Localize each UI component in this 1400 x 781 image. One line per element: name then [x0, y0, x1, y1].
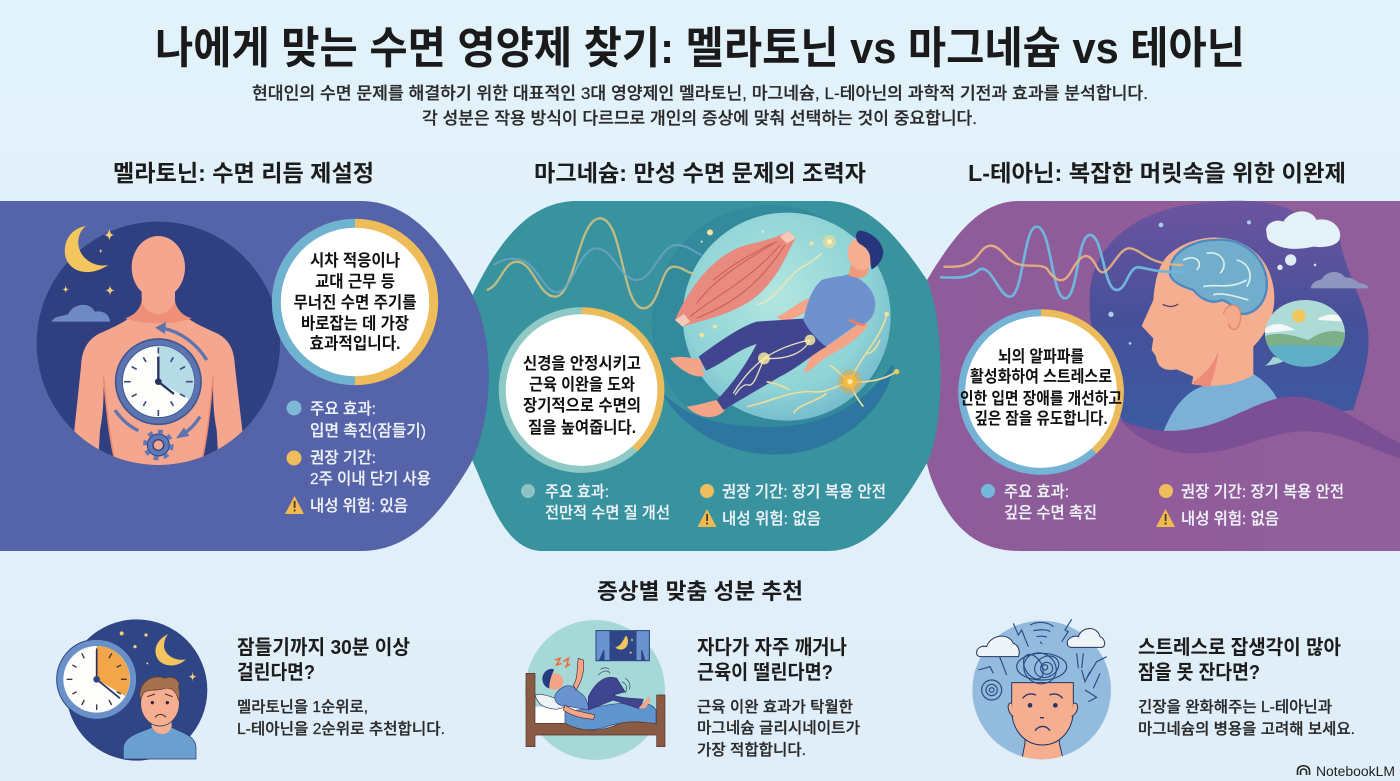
heading: recommendations: 증상별 맞춤 성분 추천 — [597, 579, 803, 604]
callout: melatonin: 바로잡는 데 가장 — [301, 314, 409, 333]
question text — [1138, 636, 1341, 684]
panel: magnesium — [460, 201, 940, 551]
callout: L-theanine: 인한 입면 장애를 개선하고 — [960, 389, 1122, 408]
callout: L-theanine: 뇌의 알파파를 — [998, 346, 1084, 366]
answer text — [237, 698, 445, 738]
legend: L-theanine: 권장 기간: 장기 복용 안전 — [1181, 483, 1344, 501]
icon: stressed head with tangled thoughts — [972, 619, 1111, 760]
question text: 걸린다면? — [237, 661, 315, 684]
callout: melatonin: 효과적입니다. — [310, 334, 400, 353]
callout: L-theanine: 깊은 잠을 유도합니다. — [974, 409, 1108, 428]
heading: magnesium: 마그네슘: 만성 수면 문제의 조력자 — [534, 160, 866, 186]
question text: 스트레스로 잡생각이 많아 — [1138, 636, 1341, 659]
answer text: 마그네슘 글리시네이트가 — [697, 719, 860, 737]
recommendation 2 — [525, 620, 860, 760]
legend: magnesium: 권장 기간: 장기 복용 안전 — [722, 483, 886, 501]
callout: L-theanine: 활성화하여 스트레스로 — [970, 367, 1112, 386]
panel: melatonin — [0, 201, 489, 551]
illustration: relaxed body with muscle and nerves — [487, 205, 899, 454]
legend: melatonin — [285, 400, 431, 515]
question text: 잠들기까지 30분 이상 — [237, 636, 410, 659]
title: 나에게 맞는 수면 영양제 찾기: 멜라토닌 vs 마그네슘 vs 테아닌 — [155, 24, 1245, 73]
callout: L-theanine — [960, 312, 1122, 472]
answer text: 마그네슘의 병용을 고려해 보세요. — [1138, 720, 1355, 738]
heading: L-theanine: L-테아닌: 복잡한 머릿속을 위한 이완제 — [968, 160, 1346, 186]
question text: 근육이 떨린다면? — [697, 661, 833, 684]
callout: melatonin: 무너진 수면 주기를 — [294, 293, 416, 312]
legend: magnesium: 주요 효과: — [545, 483, 609, 501]
logo: NotebookLM: NotebookLM — [1316, 764, 1395, 779]
legend: melatonin: 내성 위험: 있음 — [310, 497, 408, 515]
answer text: 근육 이완 효과가 탁월한 — [697, 698, 853, 716]
icon: clock and worried person — [57, 619, 207, 761]
legend: melatonin: 주요 효과: — [310, 400, 376, 418]
icon: waking in bed — [525, 620, 665, 760]
legend: magnesium — [521, 483, 886, 528]
legend: melatonin: 권장 기간: — [310, 449, 376, 467]
callout: melatonin — [275, 222, 435, 382]
answer text — [697, 698, 860, 759]
legend: magnesium: 전만적 수면 질 개선 — [545, 504, 670, 522]
legend: magnesium: 내성 위험: 없음 — [722, 510, 821, 528]
answer text — [1138, 698, 1355, 738]
legend: L-theanine — [981, 483, 1344, 528]
answer text: L-테아닌을 2순위로 추천합니다. — [237, 720, 445, 738]
illustration: head with brain and waves — [940, 201, 1400, 458]
answer text: 가장 적합합니다. — [697, 741, 806, 759]
panel: L-theanine — [917, 201, 1400, 551]
legend: L-theanine: 주요 효과: — [1004, 483, 1069, 501]
callout: magnesium: 질을 높여줍니다. — [528, 418, 636, 437]
callout: magnesium — [502, 310, 662, 470]
recommendation 1 — [57, 619, 445, 761]
callout: magnesium: 근육 이완을 도와 — [529, 375, 635, 394]
answer text: 멜라토닌을 1순위로, — [237, 698, 368, 716]
legend: L-theanine: 내성 위험: 없음 — [1181, 510, 1279, 528]
answer text: 긴장을 완화해주는 L-테아닌과 — [1138, 698, 1332, 716]
recommendation 3 — [972, 619, 1355, 760]
intro text — [252, 84, 1148, 128]
heading: melatonin: 멜라토닌: 수면 리듬 제설정 — [113, 160, 374, 186]
illustration: body clock — [37, 222, 280, 490]
legend: melatonin: 2주 이내 단기 사용 — [310, 470, 431, 488]
legend: melatonin: 입면 촉진(잠들기) — [310, 422, 426, 440]
callout: melatonin: 교대 근무 등 — [315, 272, 395, 291]
question text: 자다가 자주 깨거나 — [697, 636, 847, 659]
question text — [697, 636, 847, 684]
callout: magnesium: 신경을 안정시키고 — [523, 354, 641, 373]
callout: melatonin: 시차 적응이나 — [310, 251, 400, 270]
question text: 잠을 못 잔다면? — [1138, 661, 1260, 684]
question text — [237, 636, 410, 684]
intro text: 현대인의 수면 문제를 해결하기 위한 대표적인 3대 영양제인 멜라토닌, 마그네슘, L-테아닌의 과학적 기전과 효과를 분석합니다. — [252, 84, 1148, 103]
intro text: 각 성분은 작용 방식이 다르므로 개인의 증상에 맞춰 선택하는 것이 중요합니다. — [422, 109, 977, 128]
legend: L-theanine: 깊은 수면 촉진 — [1004, 504, 1097, 522]
callout: magnesium: 장기적으로 수면의 — [523, 396, 641, 415]
